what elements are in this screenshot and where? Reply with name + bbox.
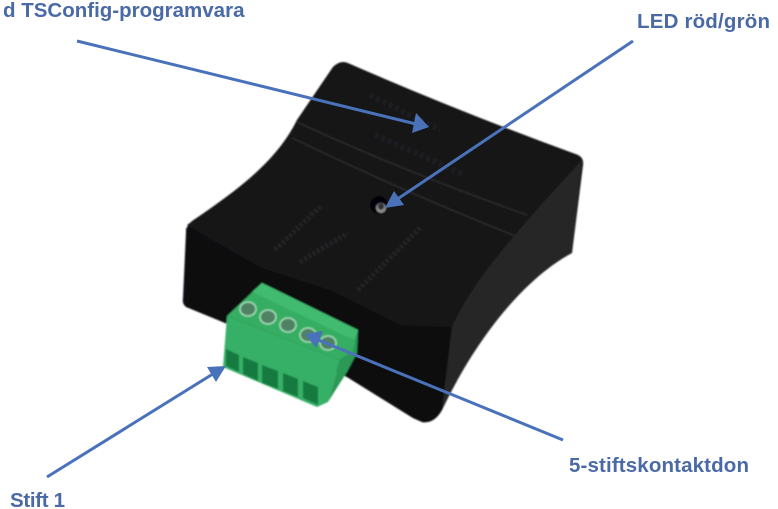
side face [442,160,582,410]
groove lines [292,122,527,236]
enclosure body [183,62,583,422]
connector side [328,330,358,402]
icon: LED [370,196,388,214]
terminal screws [240,302,336,350]
connector top [227,283,358,360]
label: 5-pin connector: 5-stiftskontaktdon [569,454,749,477]
front face [186,228,452,422]
engraved label text marks [275,205,420,290]
terminal openings [226,349,318,405]
label: LED red/green: LED röd/grön [637,10,770,33]
arrow: to LED [385,41,633,208]
device: black enclosure [183,62,583,422]
arrow: to 5-pin connector [305,331,563,440]
connector front [223,316,340,407]
arrow: to pin 1 [47,366,226,477]
arrow: to TSConfig port [77,41,429,133]
top face [187,62,582,327]
green connector [223,283,358,407]
connector ridge [252,283,358,340]
